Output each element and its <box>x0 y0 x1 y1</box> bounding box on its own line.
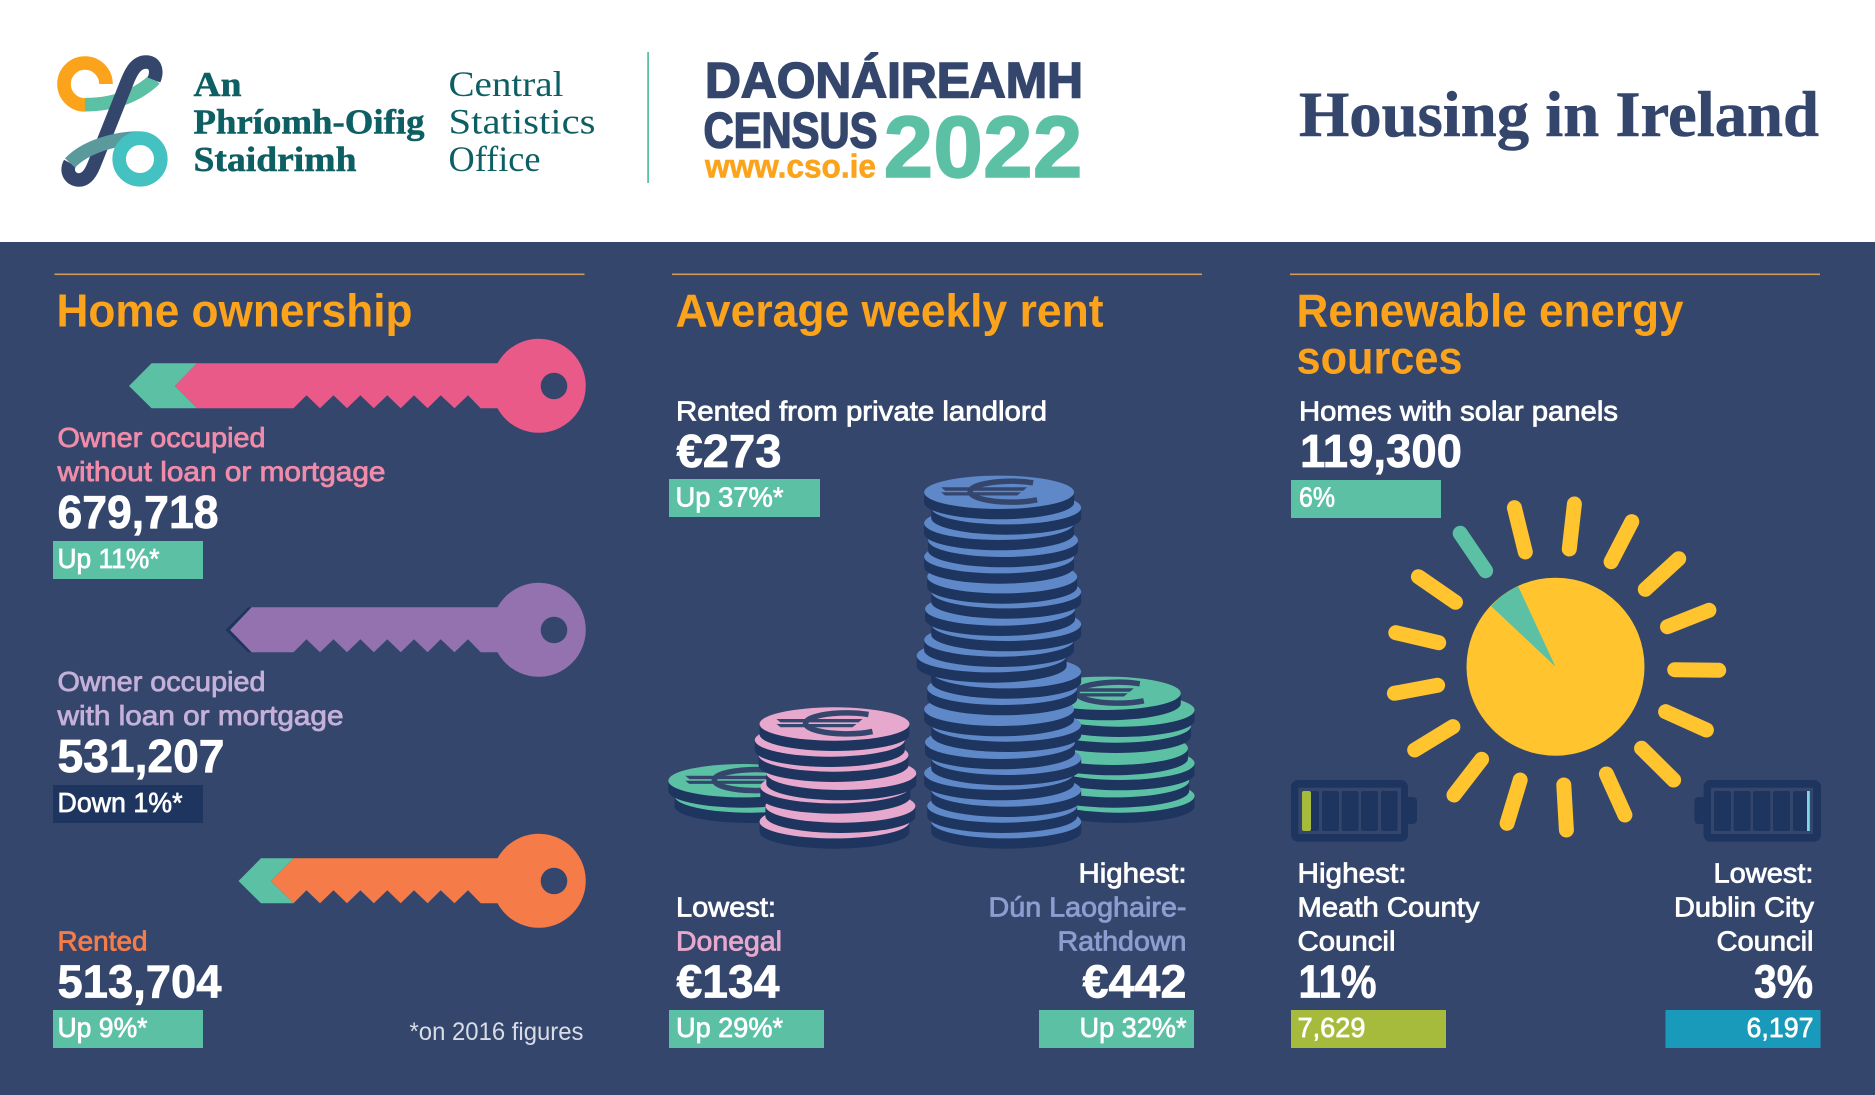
organisation name in English: Statistics <box>448 102 596 142</box>
title: Housing in Ireland <box>1299 79 1819 151</box>
change badge: up 32%: Up 32%* <box>1080 1012 1187 1043</box>
text: owner occupied without loan: without loan or mortgage <box>56 456 385 487</box>
icon: right green coin stack <box>1031 677 1195 823</box>
white header band <box>0 0 1875 242</box>
organisation name in Irish: An <box>194 65 242 104</box>
change badge: up 9% <box>53 1010 203 1048</box>
text: highest solar: Council <box>1298 926 1396 957</box>
text: private landlord rent: Rented from private landlord <box>676 396 1047 427</box>
value badge: 6,197 <box>1666 1010 1820 1048</box>
dark background panel <box>0 242 1875 1095</box>
text: lowest solar: Council <box>1716 926 1814 957</box>
text: owner occupied with loan <box>56 666 343 782</box>
organisation name in Irish: Phríomh-Oifig <box>194 103 425 142</box>
text: highest rent: €442 <box>1082 956 1186 1008</box>
text: owner occupied without loan: 679,718 <box>58 486 218 538</box>
text: homes with solar panels: 119,300 <box>1300 425 1462 477</box>
badge: 6%: 6% <box>1299 482 1335 513</box>
text: owner occupied without loan: Owner occupied <box>58 422 266 453</box>
icon: purple key <box>226 583 586 677</box>
text: highest solar <box>1298 858 1480 1008</box>
change badge: down 1%: Down 1%* <box>58 787 183 818</box>
value badge: 6,197: 6,197 <box>1746 1012 1814 1043</box>
census logo: www.cso.ie <box>704 148 876 185</box>
badge: 6% <box>1291 480 1441 518</box>
text: owner occupied without loan <box>56 422 385 538</box>
panel: renewable energy sources <box>1290 274 1821 1048</box>
header divider <box>647 52 649 183</box>
text: rented: 513,704 <box>58 956 222 1008</box>
text: lowest rent: Lowest: <box>676 892 776 923</box>
change badge: up 37% <box>669 479 820 517</box>
panel: average weekly rent <box>668 274 1202 1048</box>
text: lowest solar <box>1674 858 1814 1008</box>
organisation name in Irish: Staidrimh <box>194 140 356 179</box>
text: rented: Rented <box>58 926 148 957</box>
change badge: up 11% <box>53 541 203 579</box>
census logo: CENSUS <box>704 103 878 159</box>
change badge: up 11%: Up 11%* <box>58 543 160 574</box>
panel: home ownership <box>53 274 586 1048</box>
text: owner occupied with loan: Owner occupied <box>58 666 266 697</box>
text: rented <box>58 926 222 1008</box>
organisation name in Irish <box>194 65 425 179</box>
heading: home ownership: Home ownership <box>56 285 412 337</box>
text: private landlord rent <box>676 396 1047 477</box>
heading: renewable energy sources <box>1296 285 1684 383</box>
value badge: 7,629 <box>1291 1010 1446 1048</box>
heading: renewable energy sources: Renewable energy <box>1296 285 1684 337</box>
value badge: 7,629: 7,629 <box>1298 1012 1366 1043</box>
text: lowest solar: 3% <box>1754 956 1813 1008</box>
text: owner occupied with loan: 531,207 <box>58 730 224 782</box>
organisation name in English: Office <box>448 139 540 179</box>
icon: pink key <box>129 339 586 433</box>
census logo: DAONÁIREAMH <box>705 53 1083 109</box>
heading: average weekly rent: Average weekly rent <box>676 285 1104 337</box>
icon: pink coin stack <box>755 707 916 849</box>
change badge: up 37%: Up 37%* <box>676 482 784 513</box>
text: highest rent: Dún Laoghaire- <box>988 892 1186 923</box>
icon: CSO logo mark <box>64 62 161 180</box>
icon: tall blue coin stack <box>917 476 1081 849</box>
text: highest rent: Rathdown <box>1058 926 1186 957</box>
text: highest rent: Highest: <box>1078 858 1186 889</box>
text: homes with solar panels <box>1299 396 1618 477</box>
icon: battery 11% <box>1291 780 1417 842</box>
heading: renewable energy sources: sources <box>1296 331 1462 383</box>
text: lowest rent: Donegal <box>676 926 782 957</box>
icon: orange key <box>238 834 586 928</box>
text: lowest solar: Dublin City <box>1674 892 1814 923</box>
change badge: up 32% <box>1039 1010 1194 1048</box>
text: highest rent <box>988 858 1186 1008</box>
census logo <box>704 53 1083 196</box>
icon: small green coin stack <box>668 764 824 823</box>
icon: battery 3% <box>1694 780 1821 842</box>
change badge: up 29%: Up 29%* <box>676 1012 783 1043</box>
change badge: up 9%: Up 9%* <box>58 1012 148 1043</box>
text: owner occupied with loan: with loan or mortgage <box>56 700 343 731</box>
chart: sun pie showing 6% <box>1394 504 1719 830</box>
text: highest solar: Meath County <box>1298 892 1480 923</box>
organisation name in English <box>448 64 596 179</box>
text: private landlord rent: €273 <box>676 425 782 477</box>
census logo: 2022 <box>884 99 1082 196</box>
text: homes with solar panels: Homes with solar panels <box>1299 396 1618 427</box>
change badge: up 29% <box>669 1010 824 1048</box>
text: highest solar: 11% <box>1298 956 1376 1008</box>
organisation name in English: Central <box>448 64 564 104</box>
text: lowest rent <box>676 892 782 1008</box>
text: lowest solar: Lowest: <box>1714 858 1814 889</box>
sun rays <box>1394 504 1719 830</box>
footnote: *on 2016 figures <box>410 1018 584 1046</box>
text: highest solar: Highest: <box>1298 858 1406 889</box>
text: lowest rent: €134 <box>676 956 780 1008</box>
